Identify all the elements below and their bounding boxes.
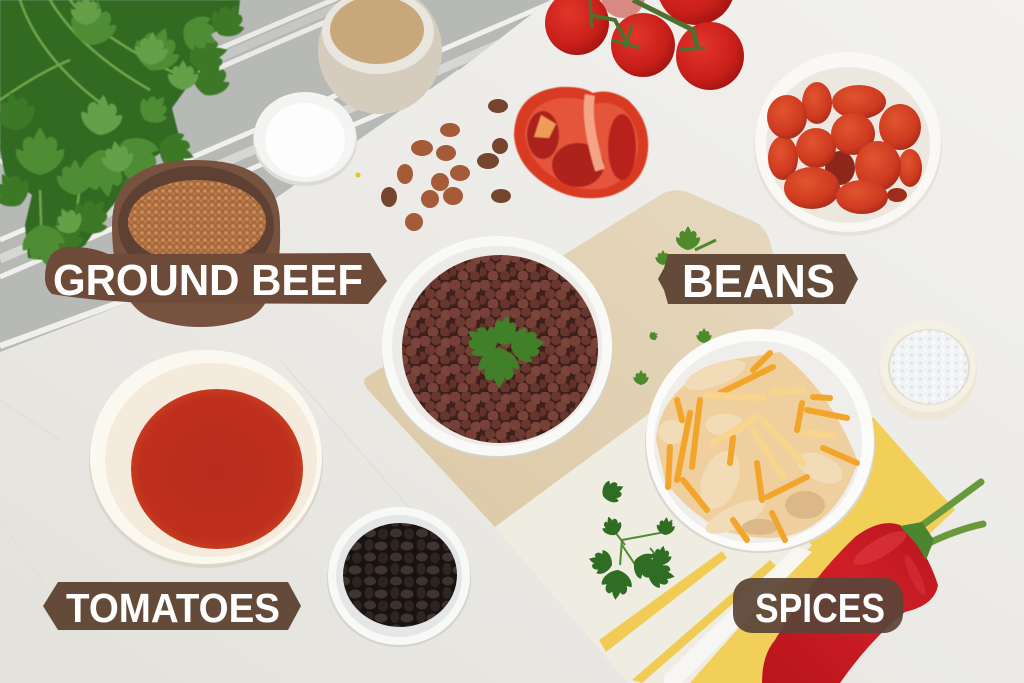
bowl of black beans: [327, 507, 471, 647]
brown bowl of ground beef: [112, 160, 280, 327]
cilantro bunch top left: [0, 0, 252, 270]
white spoon handle: [664, 546, 812, 683]
label: tomatoes: TOMATOES: [66, 585, 280, 631]
small bowl of white salt: [253, 92, 357, 186]
halved tomato: [514, 87, 648, 198]
bowl of cherry tomatoes: [754, 52, 942, 236]
bowl of shredded cheese and crumbles: [645, 329, 875, 553]
tomatoes on the vine: [545, 0, 744, 90]
small cup of coarse salt: [879, 320, 977, 421]
parsley sprigs on board: [633, 226, 716, 385]
scattered pinto beans: [356, 99, 511, 231]
yellow cloth: [680, 417, 955, 683]
cream striped board section: [495, 413, 812, 683]
central bowl of brown beans: [382, 236, 612, 458]
cutting board wood section: [364, 190, 794, 527]
red chili pepper: [762, 482, 983, 683]
label: spices: SPICES: [755, 585, 885, 631]
spice jar: [318, 0, 442, 114]
bowl of red sauce: [89, 350, 323, 568]
gray striped towel: [0, 0, 560, 360]
green herb sprig: [586, 476, 677, 601]
label: beans: BEANS: [682, 255, 835, 307]
label: ground beef: GROUND BEEF: [53, 256, 363, 305]
